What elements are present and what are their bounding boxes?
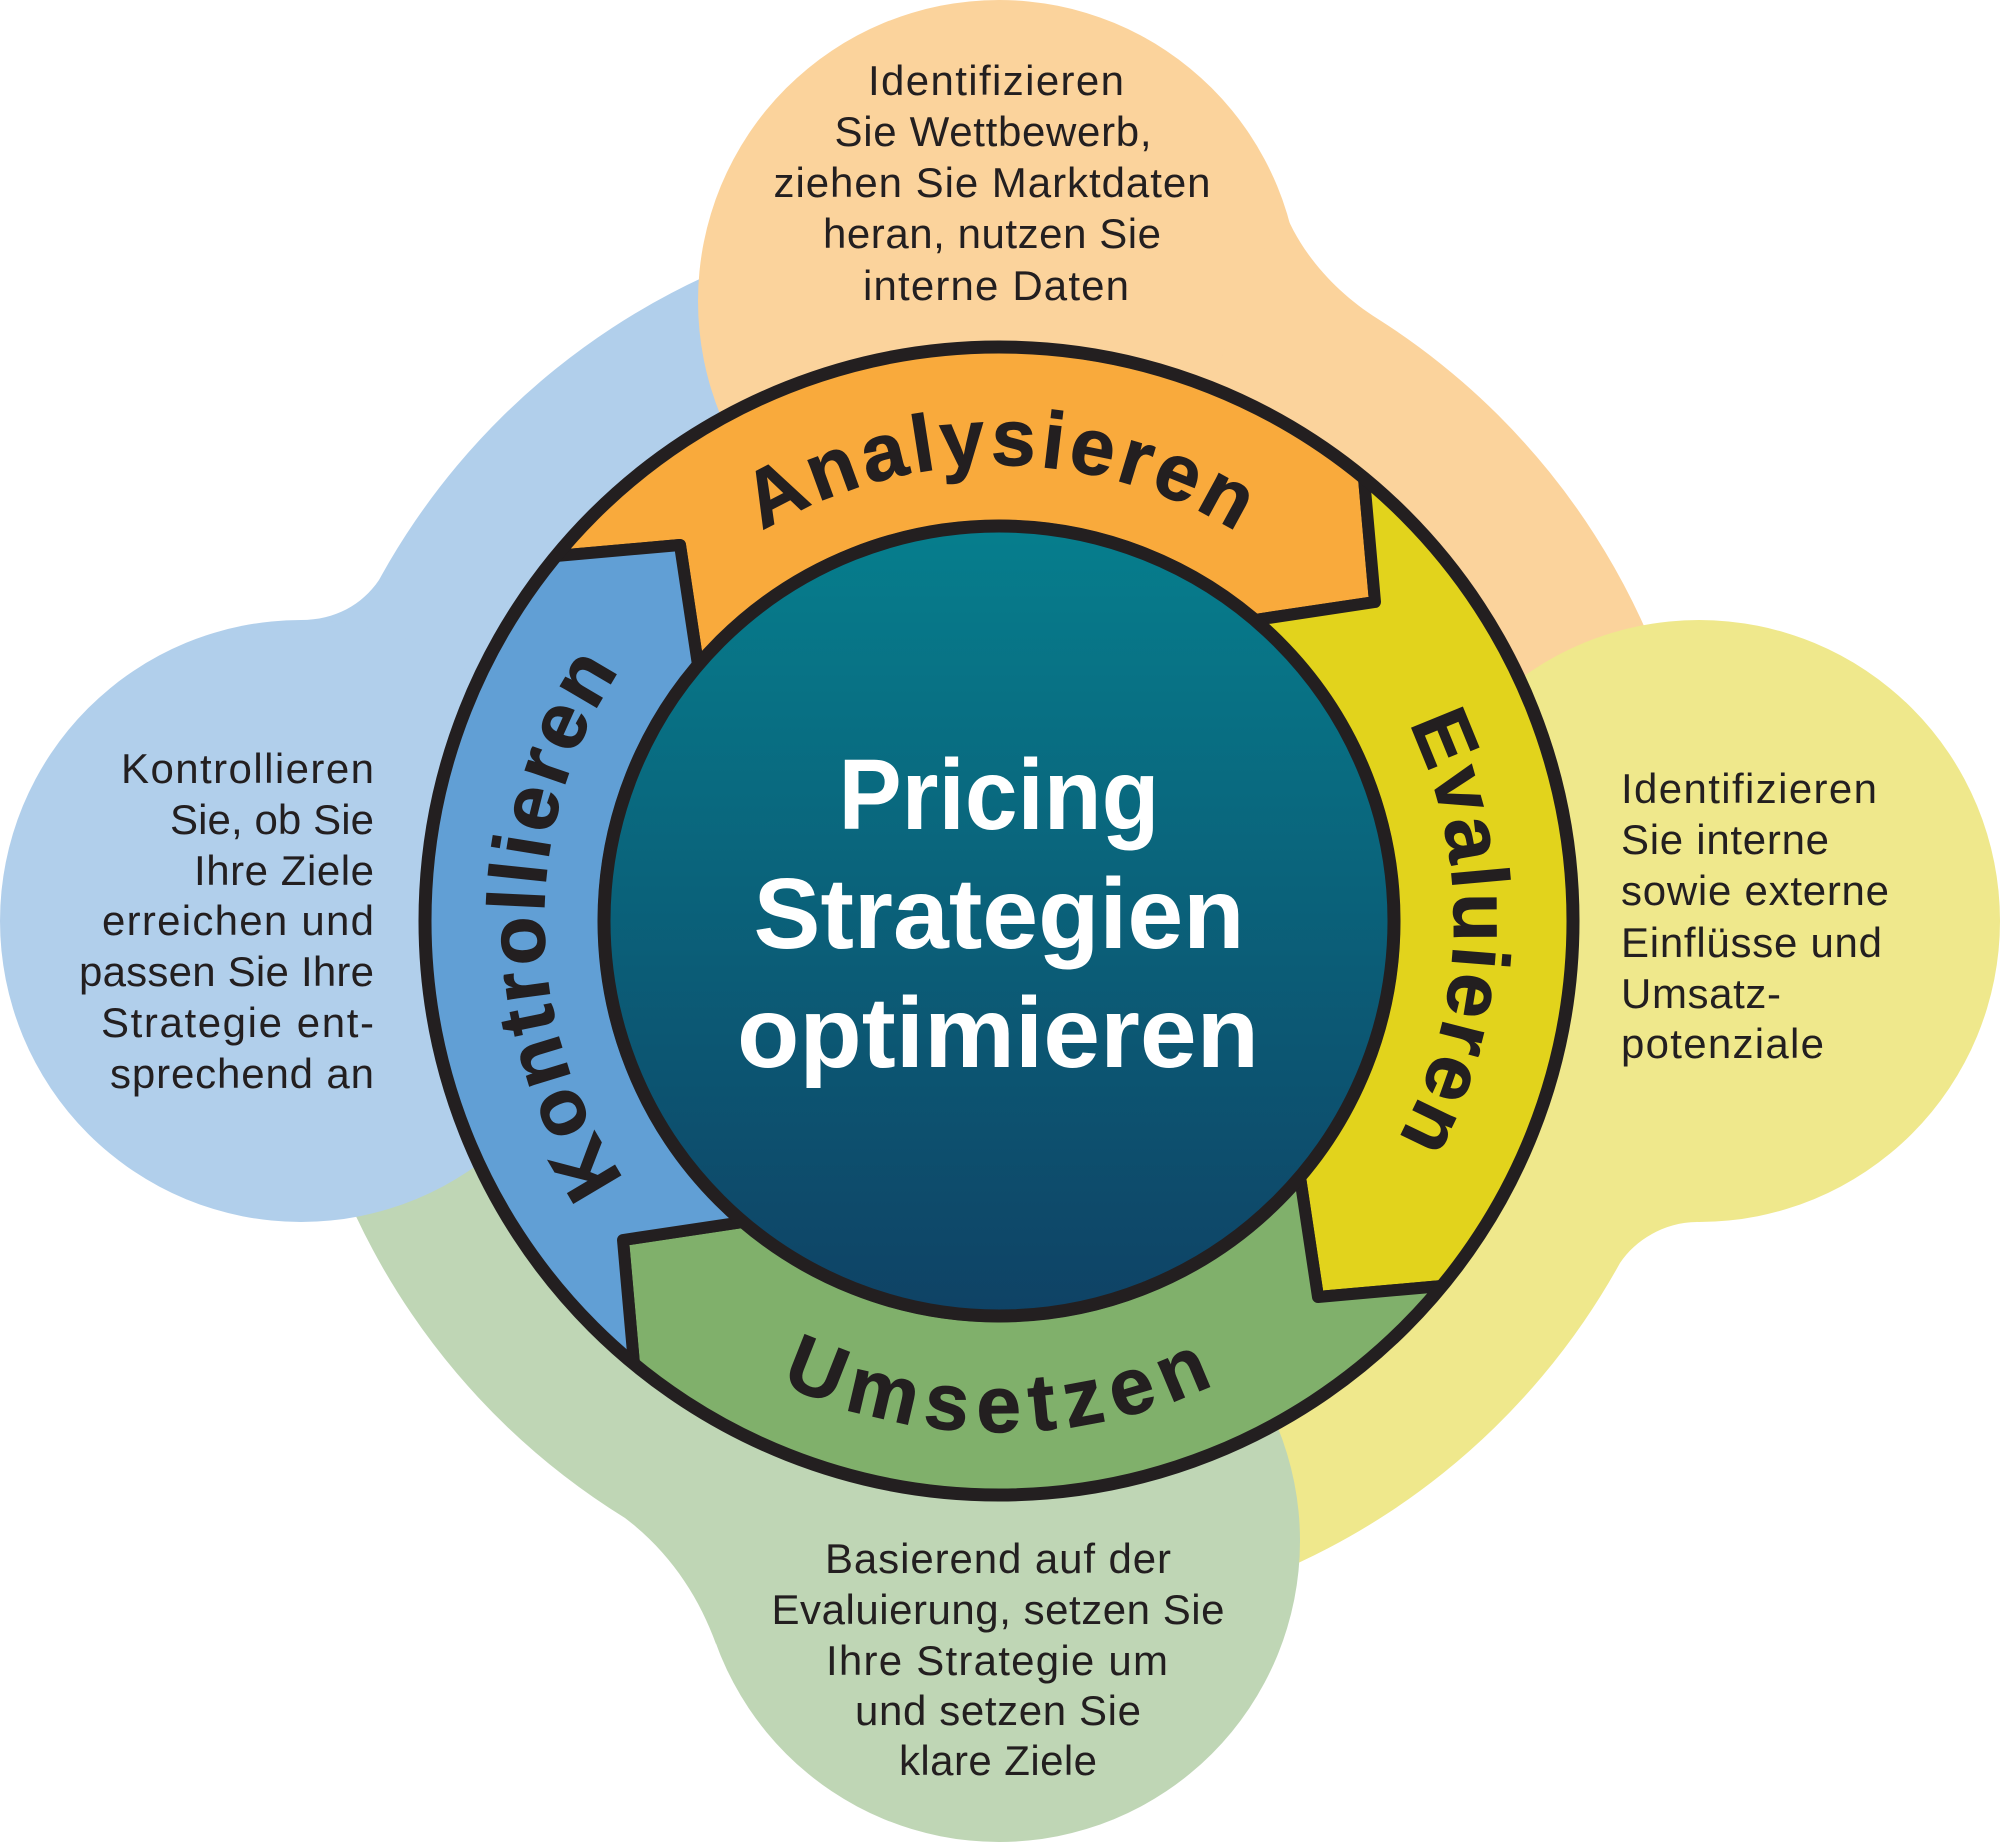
label: Evaluieren: Evaluieren	[1400, 706, 1512, 1150]
text block: Kontrollieren description	[79, 745, 374, 1097]
text block: Evaluieren description	[1621, 765, 1889, 1067]
title: optimieren	[737, 977, 1259, 1089]
label: Umsetzen: Umsetzen	[790, 1334, 1210, 1434]
text block: Analysieren description	[774, 57, 1210, 309]
text block: Evaluieren description: Einflüsse und	[1621, 919, 1882, 966]
text block: Evaluieren description: sowie externe	[1621, 867, 1889, 914]
panel: green petal	[300, 921, 1300, 1842]
text block: Evaluieren description: Umsatz-	[1621, 970, 1781, 1017]
label: Analysieren: Analysieren	[756, 409, 1249, 530]
panel: blue petal	[0, 620, 602, 1222]
text block: Analysieren description: interne Daten	[863, 262, 1129, 309]
centre disc	[604, 526, 1394, 1316]
text block: Evaluieren description: Sie interne	[1621, 816, 1829, 863]
panel: orange petal	[698, 0, 1700, 921]
text block: Kontrollieren description: Kontrollieren	[121, 745, 374, 792]
title: Pricing	[838, 739, 1160, 851]
text block: Analysieren description: heran, nutzen Sie	[823, 210, 1161, 257]
text block: Evaluieren description: potenziale	[1621, 1020, 1824, 1067]
panel: yellow petal	[999, 620, 2000, 1600]
text block: Kontrollieren description: Sie, ob Sie	[170, 796, 374, 843]
text block: Kontrollieren description: Ihre Ziele	[194, 847, 374, 894]
text block: Umsetzen description: Basierend auf der	[825, 1535, 1171, 1582]
outer ring	[425, 347, 1573, 1495]
segment: Evaluieren arrow	[1255, 478, 1573, 1297]
text block: Kontrollieren description: erreichen und	[102, 897, 374, 944]
text block: Evaluieren description: Identifizieren	[1621, 765, 1877, 812]
segment: Kontrollieren arrow	[425, 545, 743, 1364]
title	[737, 739, 1259, 1089]
title: Strategien	[754, 858, 1244, 970]
text block: Umsetzen description: Ihre Strategie um	[826, 1637, 1168, 1684]
segment: Analysieren arrow	[556, 347, 1375, 665]
text block: Analysieren description: ziehen Sie Marktdaten	[774, 159, 1210, 206]
label: Kontrollieren: Kontrollieren	[486, 657, 622, 1204]
text block: Umsetzen description: Evaluierung, setzen Sie	[772, 1586, 1224, 1633]
text block: Kontrollieren description: Strategie ent-	[101, 999, 374, 1046]
text block: Umsetzen description: klare Ziele	[899, 1737, 1097, 1784]
text block: Analysieren description: Sie Wettbewerb,	[834, 108, 1152, 155]
text block: Analysieren description: Identifizieren	[868, 57, 1124, 104]
text block: Kontrollieren description: sprechend an	[110, 1050, 374, 1097]
text block: Kontrollieren description: passen Sie Ihre	[79, 948, 374, 995]
text block: Umsetzen description: und setzen Sie	[855, 1687, 1141, 1734]
segment: Umsetzen arrow	[623, 1177, 1442, 1495]
text block: Umsetzen description	[772, 1535, 1224, 1784]
blue petal arm	[301, 241, 999, 921]
